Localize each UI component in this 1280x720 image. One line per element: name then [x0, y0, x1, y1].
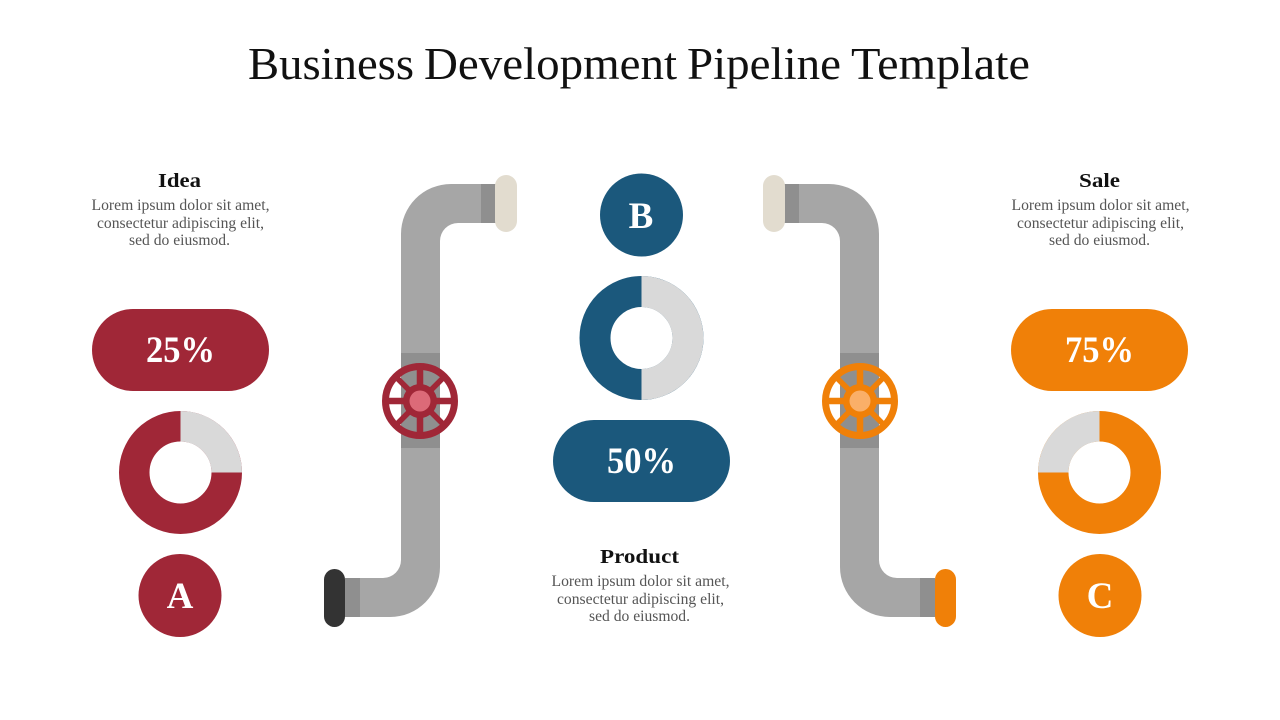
text block: sale: sed do eiusmod.: [1049, 232, 1150, 249]
pipe: right: [763, 175, 956, 627]
text block: sale: Lorem ipsum dolor sit amet,: [1012, 197, 1190, 214]
pipe cap: bottom: [935, 569, 956, 627]
title: Pipeline: [687, 39, 841, 89]
pipe collar: bottom: [345, 578, 360, 617]
percentage pill: 75%: 75%: [1065, 330, 1134, 371]
title: Business: [248, 39, 414, 89]
percentage pill: 25%: 25%: [146, 330, 215, 371]
text block: idea: Idea: [158, 170, 201, 192]
pipe cap: top: [763, 175, 785, 232]
text block: product: consectetur adipiscing elit,: [557, 591, 724, 608]
letter badge: B: B: [629, 196, 653, 237]
text block: idea: sed do eiusmod.: [129, 232, 230, 249]
letter badge: A: [138, 554, 222, 637]
text block: sale: consectetur adipiscing elit,: [1017, 215, 1184, 232]
panel: sale (C): [1011, 170, 1190, 637]
percentage pill: 25%: [92, 309, 269, 391]
pipe cap: bottom: [324, 569, 345, 627]
text block: idea: consectetur adipiscing elit,: [97, 215, 264, 232]
donut chart: 75%: [1038, 411, 1146, 519]
percentage pill: 50%: [553, 420, 730, 502]
percentage pill: 75%: [1011, 309, 1188, 391]
text block: idea: [92, 170, 270, 249]
donut chart: 25%: [134, 411, 242, 519]
pipe body: [784, 184, 935, 617]
donut chart: 50%: [595, 276, 703, 400]
valve band: [401, 353, 440, 448]
letter badge: C: [1058, 554, 1142, 637]
letter badge: C: C: [1087, 576, 1113, 617]
pipe collar: top: [481, 184, 496, 223]
text block: product: sed do eiusmod.: [589, 608, 690, 625]
pipe collar: bottom: [920, 578, 935, 617]
letter badge: B: [600, 174, 683, 256]
letter badge: A: A: [167, 576, 194, 617]
text block: product: [552, 546, 730, 625]
text block: product: Product: [600, 546, 679, 568]
title: [248, 39, 1030, 89]
percentage pill: 50%: 50%: [607, 441, 676, 482]
title: Development: [424, 39, 678, 89]
valve band: [840, 353, 879, 448]
pipe: left: [324, 175, 517, 627]
panel: product (B): [552, 174, 730, 625]
icon: valve wheel: [384, 365, 456, 437]
pipe body: [345, 184, 496, 617]
pipe cap: top: [495, 175, 517, 232]
text block: sale: Sale: [1079, 170, 1120, 192]
icon: valve wheel: [824, 365, 896, 437]
panel: idea (A): [92, 170, 270, 637]
title: Template: [851, 39, 1030, 89]
text block: idea: Lorem ipsum dolor sit amet,: [92, 197, 270, 214]
text block: sale: [1012, 170, 1190, 249]
text block: product: Lorem ipsum dolor sit amet,: [552, 573, 730, 590]
pipe collar: top: [784, 184, 799, 223]
